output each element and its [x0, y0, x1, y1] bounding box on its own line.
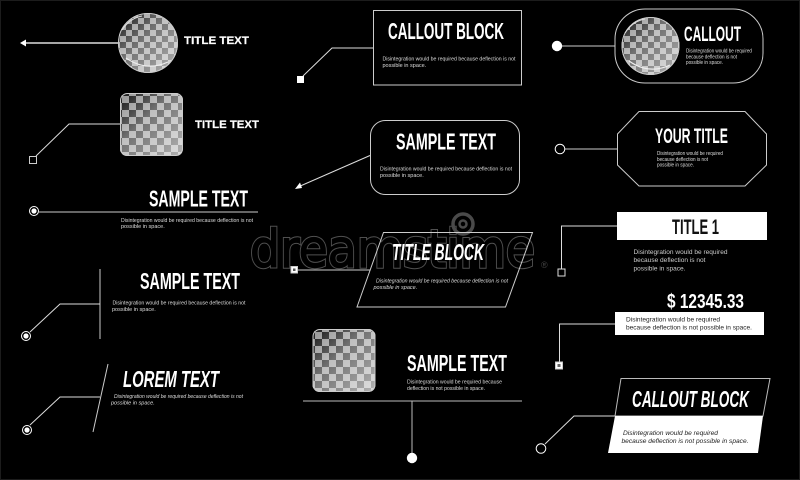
- description: [626, 316, 752, 332]
- callout: rounded image with title: [30, 93, 259, 164]
- callout: title block parallelogram: [291, 232, 532, 307]
- description: [407, 380, 502, 392]
- connector with filled square: [297, 48, 373, 83]
- description: [686, 48, 752, 66]
- frame: [618, 112, 766, 186]
- description: because deflection is not: [634, 257, 706, 264]
- connector with dot: [552, 41, 615, 51]
- heading: SAMPLE TEXT: [407, 350, 507, 376]
- description: possible in space.: [121, 224, 165, 230]
- frame: [374, 10, 522, 85]
- banner: [617, 212, 767, 240]
- heading: LOREM TEXT: [123, 366, 220, 392]
- description: [622, 430, 749, 445]
- description: [657, 151, 723, 168]
- callout: sample text with vertical bar: [22, 268, 246, 340]
- description: deflection is not possible in space.: [407, 386, 485, 392]
- description: possible in space.: [372, 285, 417, 291]
- description: Disintegration would be required because deflection is not: [380, 166, 512, 172]
- callout: rounded sample text: [295, 120, 520, 194]
- banner: [615, 312, 764, 335]
- icon: rounded checker image: [312, 329, 376, 392]
- frame top: [615, 378, 770, 416]
- description: because deflection is not: [657, 157, 708, 163]
- callout: callout block rectangle: [297, 10, 522, 85]
- description: possible in space.: [686, 60, 723, 66]
- connector with square marker: [558, 226, 617, 276]
- description: because deflection is not possible in space.: [622, 438, 749, 445]
- underline with ring marker: [30, 206, 258, 216]
- frame: [615, 9, 763, 83]
- description: possible in space.: [112, 307, 156, 313]
- connector with square marker: [291, 266, 370, 273]
- heading: CALLOUT: [684, 23, 741, 46]
- heading: TITLE BLOCK: [392, 239, 485, 265]
- description: [372, 278, 508, 291]
- description: possible in space.: [634, 266, 686, 272]
- description: Disintegration would be required: [657, 151, 723, 157]
- description: Disintegration would be required because deflection is not: [114, 394, 243, 400]
- frame: [357, 232, 532, 307]
- icon: rounded checker image: [120, 93, 183, 156]
- icon: circular checker image: [118, 13, 178, 73]
- description: possible in space.: [382, 63, 427, 69]
- watermark: dreamstime: [250, 220, 535, 280]
- stem with dot: [303, 401, 522, 463]
- heading: SAMPLE TEXT: [149, 186, 248, 212]
- white lower panel: [608, 416, 763, 453]
- description: because deflection is not: [686, 54, 737, 60]
- description: [121, 218, 253, 230]
- heading: SAMPLE TEXT: [396, 128, 496, 154]
- watermark: ®: [541, 260, 548, 270]
- heading: YOUR TITLE: [655, 125, 728, 148]
- arrow: diagonal: [295, 156, 370, 189]
- callout: image with sample text and stem: [303, 329, 522, 463]
- callout: price: [556, 291, 764, 369]
- callout: pill with circle image: [552, 9, 763, 83]
- description: [112, 300, 246, 313]
- description: Disintegration would be required because: [407, 380, 502, 386]
- description: possible in space.: [110, 400, 155, 406]
- connector with ring: [555, 144, 617, 154]
- title text: TITLE TEXT: [184, 35, 249, 47]
- description: [380, 166, 512, 179]
- description: Disintegration would be required because deflection is not: [121, 218, 253, 224]
- watermark: dreamstime: [250, 220, 535, 280]
- description: Disintegration would be required: [623, 430, 718, 437]
- heading: SAMPLE TEXT: [140, 268, 240, 294]
- callout: lorem text with slanted bar: [22, 364, 243, 434]
- description: [110, 394, 243, 406]
- connector with ring marker: [22, 364, 108, 434]
- description: possible in space.: [380, 173, 424, 179]
- connector with square marker: [556, 324, 615, 369]
- title text: TITLE TEXT: [195, 119, 259, 131]
- frame: [370, 120, 520, 194]
- price value: $ 12345.33: [667, 291, 744, 313]
- connector with ring: [536, 416, 615, 453]
- description: possible in space.: [657, 162, 694, 168]
- description: because deflection is not possible in space.: [626, 324, 752, 332]
- heading: CALLOUT BLOCK: [388, 18, 504, 44]
- heading: TITLE 1: [672, 216, 719, 239]
- callout: sample text on underline: [30, 186, 258, 230]
- callout: title 1 banner: [558, 212, 767, 276]
- description: Disintegration would be required: [686, 48, 752, 54]
- description: [382, 56, 516, 69]
- description: [634, 249, 728, 272]
- callout: callout block slanted two-tone: [536, 378, 770, 453]
- description: Disintegration would be required because deflection is not: [382, 56, 516, 62]
- description: Disintegration would be required because deflection is not: [112, 300, 246, 306]
- arrow: left: [20, 40, 118, 46]
- callout: circle image with title, arrow left: [20, 13, 249, 73]
- icon: circular checker image: [622, 17, 680, 75]
- description: Disintegration would be required because deflection is not: [376, 278, 508, 284]
- callout: octagon your title: [555, 112, 766, 186]
- description: Disintegration would be required: [626, 316, 720, 324]
- description: Disintegration would be required: [634, 249, 728, 256]
- connector with ring marker: [22, 269, 100, 340]
- connector with square marker: [30, 124, 120, 164]
